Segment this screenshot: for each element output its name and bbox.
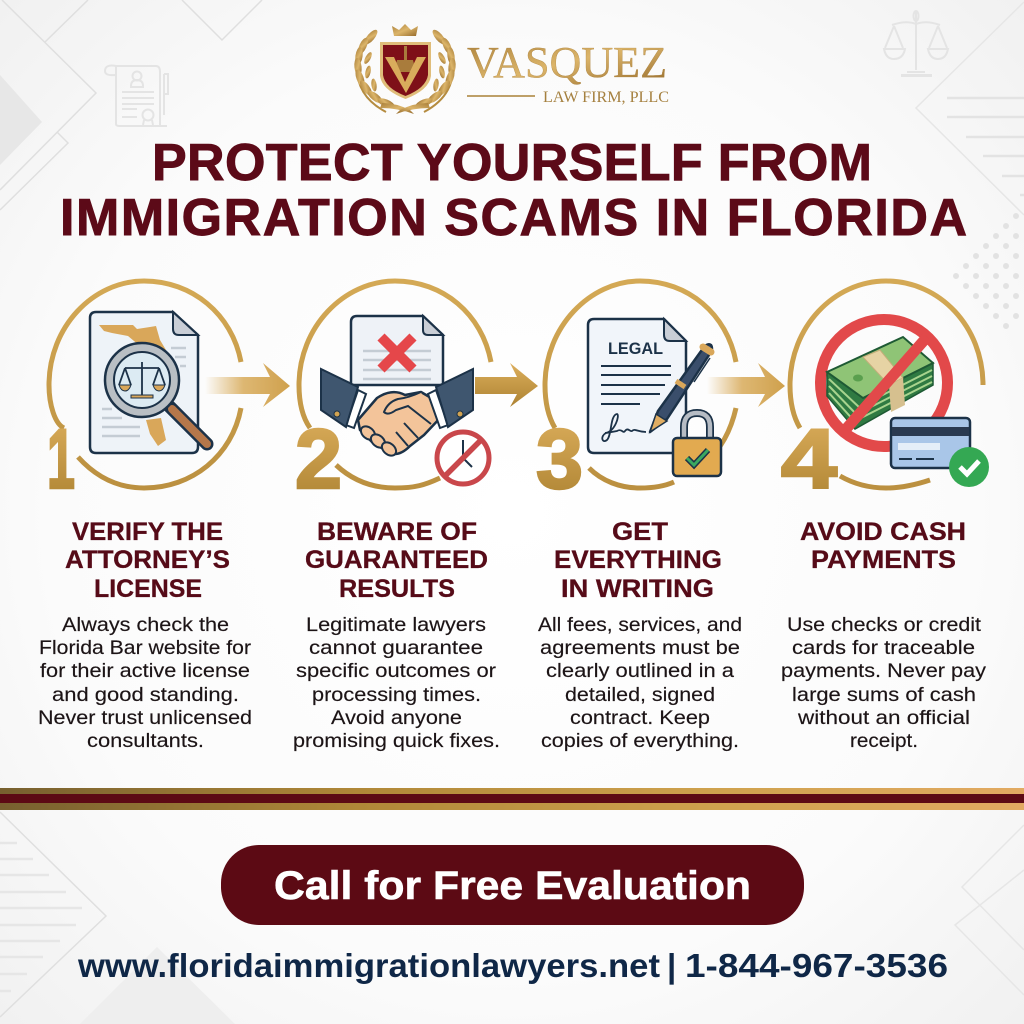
logo crown <box>392 24 418 36</box>
contact line: 1-844-967-3536 <box>685 947 948 984</box>
step 2 body text: specific outcomes or <box>296 660 497 682</box>
icon: crossed-out clock <box>437 432 489 484</box>
step 3 heading: GET <box>612 518 668 546</box>
step 1 body text: consultants. <box>87 730 204 752</box>
step 4 ring <box>790 281 983 488</box>
step 1 heading: LICENSE <box>94 575 202 603</box>
step 1 body text <box>38 614 252 752</box>
logo: Vasquez Law Firm <box>353 24 669 114</box>
step 3 body text: clearly outlined in a <box>546 660 734 682</box>
step 2 ring <box>299 281 491 488</box>
logo shield <box>380 42 431 99</box>
step 4 body text: payments. Never pay <box>781 660 986 682</box>
step 1 heading: ATTORNEY’S <box>65 546 230 574</box>
step 2 number: 2 <box>295 412 342 506</box>
step 2 heading: RESULTS <box>339 575 455 603</box>
arrow 1 <box>205 363 290 407</box>
contact line: | <box>667 947 676 984</box>
step 1 body text: for their active license <box>40 660 250 682</box>
step 4 heading: PAYMENTS <box>811 546 956 574</box>
step 1 number: 1 <box>47 412 75 506</box>
step 2 heading <box>305 518 488 603</box>
step 3 ring <box>545 281 736 488</box>
step 1 heading <box>65 518 230 603</box>
icon: legal contract with pen and lock <box>588 319 721 476</box>
icon: prohibited cash stack and approved credit card <box>820 320 989 487</box>
step 1 body text: Florida Bar website for <box>39 637 252 659</box>
logo laurel wreath <box>353 28 457 114</box>
step 4 heading: AVOID CASH <box>800 518 966 546</box>
step 3 body text: detailed, signed <box>565 684 715 706</box>
step 3 heading: EVERYTHING <box>554 546 722 574</box>
title: IMMIGRATION SCAMS IN FLORIDA <box>60 189 967 247</box>
call to action button: Call for Free Evaluation <box>274 864 751 908</box>
step 4 body text <box>781 614 986 752</box>
step 4 body text: Use checks or credit <box>787 614 982 636</box>
step 4 body text: large sums of cash <box>792 684 976 706</box>
step 2 heading: BEWARE OF <box>317 518 477 546</box>
step 3 body text: agreements must be <box>540 637 740 659</box>
step 2 body text: Legitimate lawyers <box>306 614 486 636</box>
step 3 number: 3 <box>536 412 583 506</box>
step 4 body text: without an official <box>797 707 970 729</box>
step 1 body text: and good standing. <box>52 684 239 706</box>
step 3 heading <box>554 518 722 603</box>
step 3 heading: IN WRITING <box>561 575 714 603</box>
step 1 ring <box>49 281 241 488</box>
step 1 body text: Never trust unlicensed <box>38 707 252 729</box>
divider band <box>0 788 1024 810</box>
step 4 number: 4 <box>781 412 837 506</box>
step 2 body text: cannot guarantee <box>309 637 483 659</box>
icon: legal contract with pen and lock: LEGAL <box>608 339 663 358</box>
contact line <box>77 947 948 984</box>
icon: faint certificate document <box>105 66 168 126</box>
step 2 heading: GUARANTEED <box>305 546 488 574</box>
title: PROTECT YOURSELF FROM <box>152 134 872 192</box>
step 4 heading <box>800 518 966 574</box>
step 2 body text: processing times. <box>312 684 481 706</box>
icon: contract with red X and handshake <box>321 316 489 484</box>
call to action button <box>221 845 804 925</box>
icon: document with Florida and magnifying glass <box>90 312 207 453</box>
step 2 body text: promising quick fixes. <box>293 730 500 752</box>
title <box>60 134 967 247</box>
step 3 body text: contract. Keep <box>570 707 710 729</box>
step 3 body text: All fees, services, and <box>538 614 742 636</box>
step 4 body text: receipt. <box>850 730 918 752</box>
step 2 body text: Avoid anyone <box>331 707 462 729</box>
logo subtitle: LAW FIRM, PLLC <box>543 89 669 106</box>
step 2 <box>295 281 491 506</box>
step 1 <box>47 281 241 506</box>
contact line: www.floridaimmigrationlawyers.net <box>77 947 660 984</box>
step 3 body text <box>538 614 742 752</box>
icon: faint scales of justice <box>884 11 948 76</box>
arrow 3 <box>707 363 785 407</box>
step 4 body text: cards for traceable <box>792 637 975 659</box>
step 3 <box>536 281 736 506</box>
step 1 body text: Always check the <box>62 614 229 636</box>
step 4 <box>781 281 989 506</box>
step 3 body text: copies of everything. <box>541 730 739 752</box>
step 1 heading: VERIFY THE <box>72 518 223 546</box>
arrow 2 <box>475 363 538 407</box>
logo wordmark: VASQUEZ <box>467 38 667 87</box>
step 2 body text <box>293 614 500 752</box>
